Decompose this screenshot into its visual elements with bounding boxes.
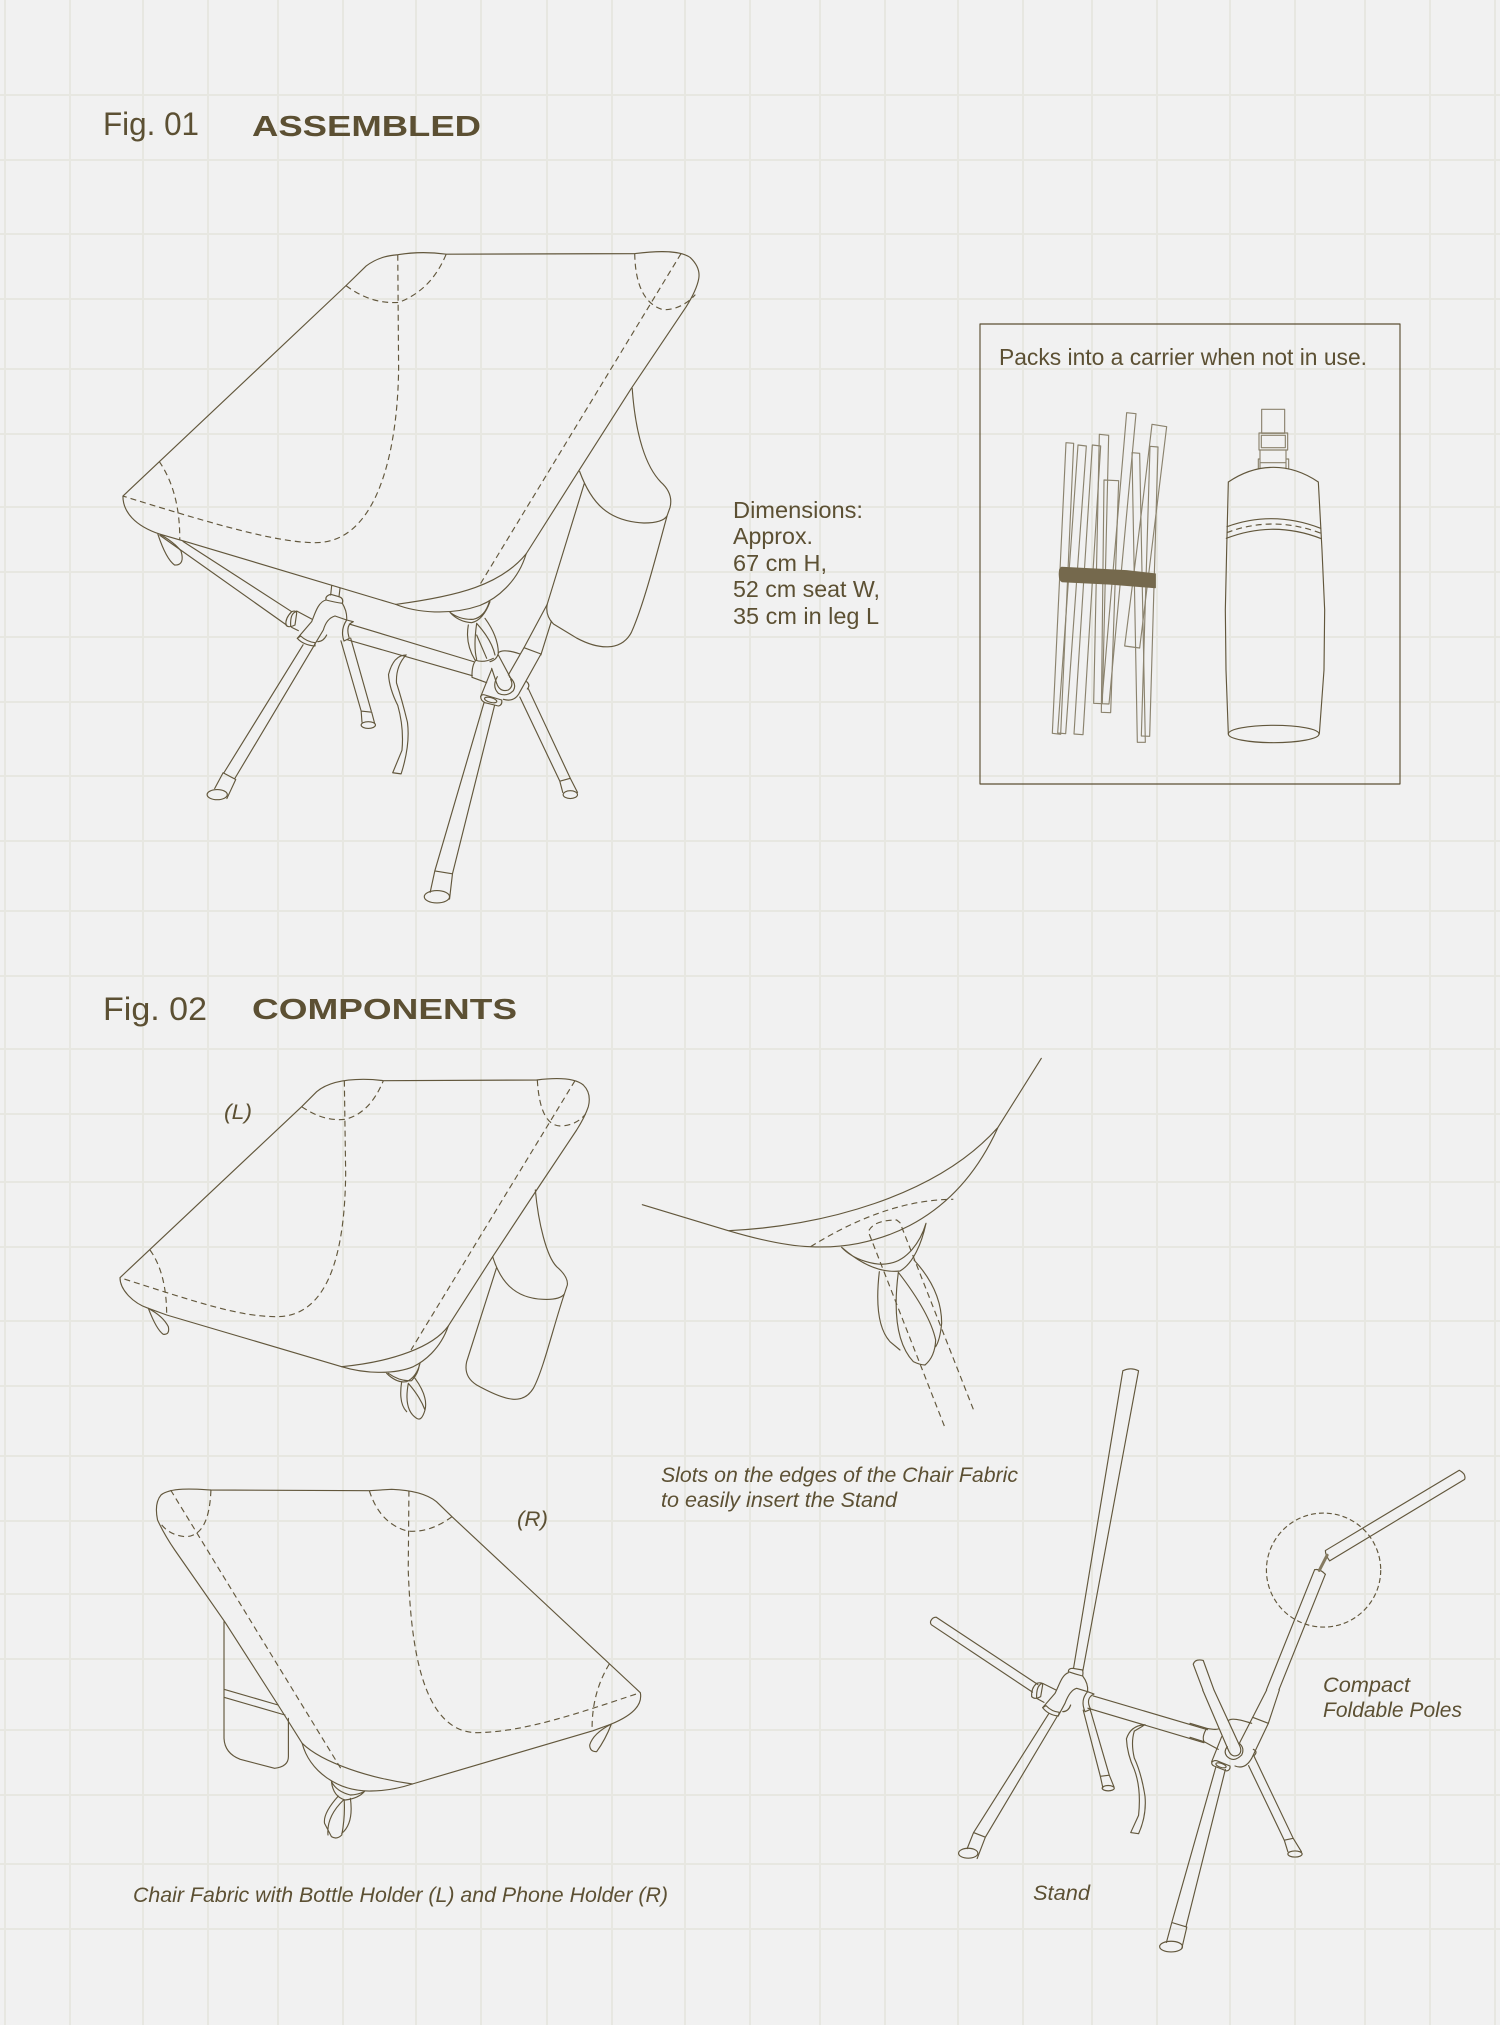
fabric loops	[324, 1724, 611, 1838]
slots caption: Slots on the edges of the Chair Fabric	[661, 1463, 1018, 1487]
icon: folded poles with band	[1052, 413, 1167, 742]
caption: chair fabric: Chair Fabric with Bottle Holder (L) and Phone Holder (R)	[133, 1883, 668, 1907]
slots caption: to easily insert the Stand	[661, 1488, 898, 1512]
dimensions text: 67 cm H,	[733, 550, 827, 576]
left stand hub	[1032, 1668, 1094, 1716]
icon: carrier bag	[1225, 409, 1325, 743]
illustration: stand with foldable poles	[930, 1369, 1465, 1952]
seat lower curve	[396, 554, 526, 612]
fabric loops	[148, 1308, 426, 1419]
label: compact foldable poles: Compact	[1323, 1673, 1411, 1697]
illustration: chair fabric right	[156, 1489, 641, 1838]
strap	[1126, 1725, 1145, 1834]
label: compact foldable poles	[1323, 1673, 1462, 1722]
label: compact foldable poles: Foldable Poles	[1323, 1698, 1462, 1722]
right stand hub	[1190, 1690, 1279, 1771]
caption: stand: Stand	[1033, 1881, 1091, 1905]
dimensions text: 52 cm seat W,	[733, 576, 880, 602]
stand poles and feet	[160, 535, 577, 903]
left hub detail	[286, 586, 353, 646]
heading: Fig. 02 Components: COMPONENTS	[252, 994, 517, 1026]
heading: Fig. 01 Assembled: ASSEMBLED	[252, 111, 481, 143]
heading: Fig. 02 Components: Fig. 02	[103, 991, 207, 1027]
chair fabric outline	[123, 252, 699, 604]
bottle holder	[547, 388, 671, 647]
label: (R): (R)	[517, 1507, 548, 1531]
right hub detail	[450, 602, 541, 706]
bottle holder	[466, 1190, 567, 1399]
panel: packed carrier	[980, 324, 1400, 784]
dimensions text: 35 cm in leg L	[733, 603, 879, 629]
heading: Fig. 01 Assembled: Fig. 01	[103, 106, 199, 142]
phone holder	[224, 1622, 288, 1768]
illustration: assembled chair	[123, 252, 699, 903]
stand poles and feet	[930, 1369, 1325, 1952]
carrier caption: Packs into a carrier when not in use.	[999, 344, 1367, 370]
label: (L): (L)	[224, 1100, 252, 1124]
panel border	[980, 324, 1400, 784]
seam stitching	[123, 254, 695, 585]
illustration: slot detail	[642, 1058, 1041, 1426]
heading: Fig. 01 Assembled	[103, 106, 481, 143]
dimensions text: Approx.	[733, 523, 813, 549]
dimensions text	[733, 497, 880, 629]
heading: Fig. 02 Components	[103, 991, 517, 1027]
illustration: chair fabric left	[120, 1079, 589, 1419]
fabric loop left	[158, 534, 182, 565]
slots caption	[661, 1463, 1018, 1512]
foldable joint	[1266, 1470, 1465, 1627]
dimensions text: Dimensions:	[733, 497, 863, 523]
